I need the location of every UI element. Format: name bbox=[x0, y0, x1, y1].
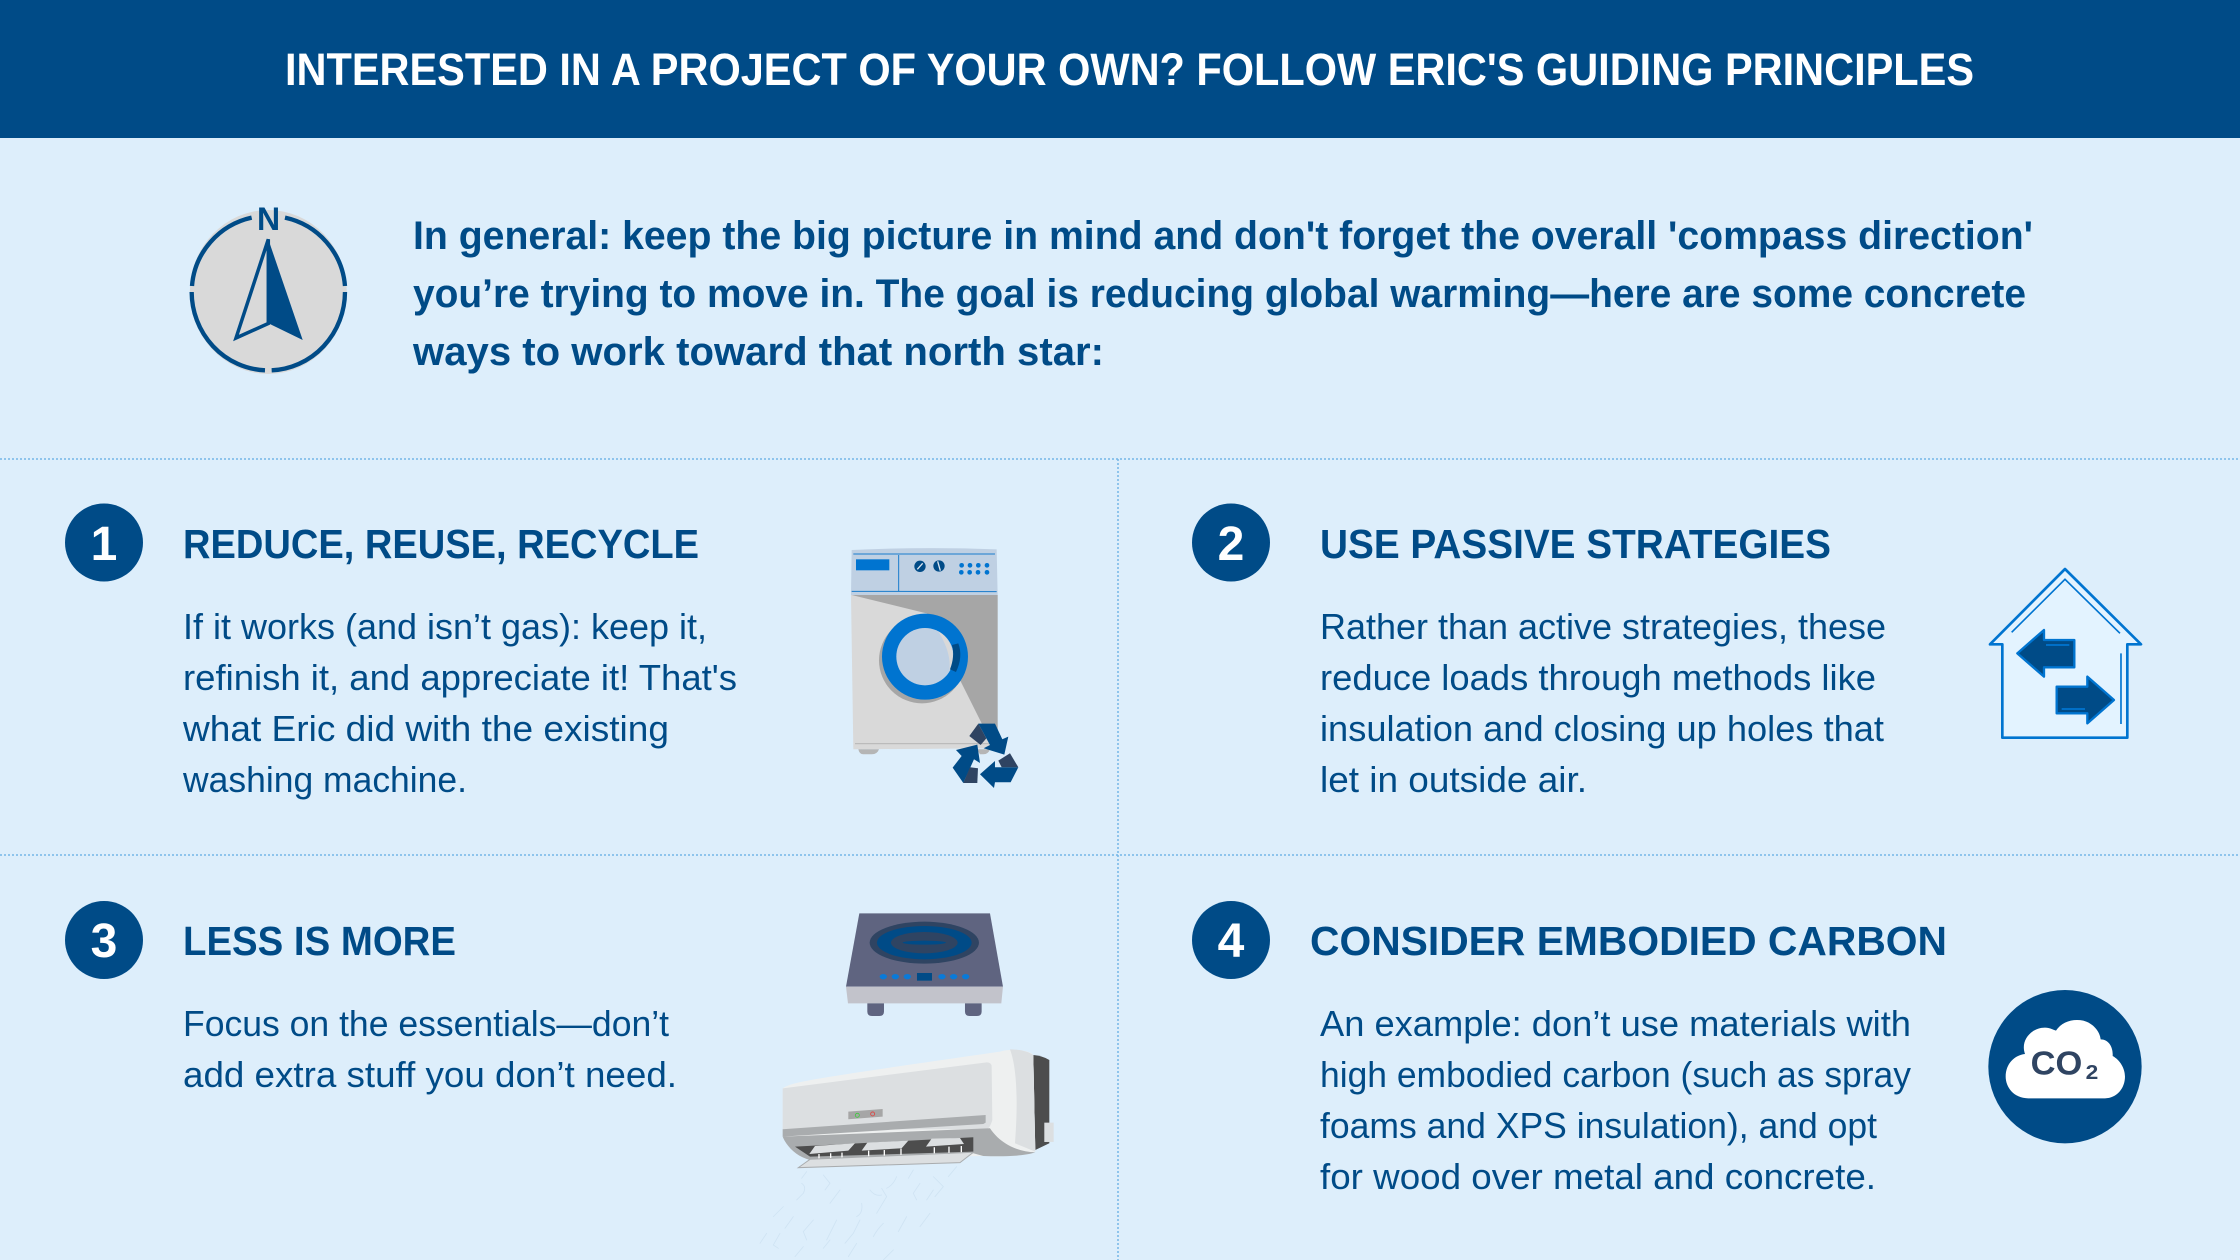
icon: washing machine with recycle symbol bbox=[851, 548, 1018, 788]
icon: CO2 cloud: 2 bbox=[2086, 1061, 2098, 1084]
number badge 1 bbox=[65, 504, 143, 582]
icon: compass: N bbox=[257, 201, 280, 237]
number badge 4: 4 bbox=[1218, 915, 1245, 968]
body text 4: high embodied carbon (such as spray bbox=[1320, 1054, 1911, 1095]
number badge 4 bbox=[1192, 901, 1270, 979]
heading 2: USE PASSIVE STRATEGIES bbox=[1320, 521, 1831, 567]
body text 1 bbox=[182, 606, 737, 800]
icon: compass bbox=[190, 201, 347, 374]
header banner bbox=[0, 0, 2240, 138]
body text 1: refinish it, and appreciate it! That's bbox=[183, 657, 737, 698]
panel: use passive strategies bbox=[1192, 504, 2141, 800]
number badge 2 bbox=[1192, 504, 1270, 582]
body text 4 bbox=[1320, 1003, 1911, 1197]
number badge 3 bbox=[65, 901, 143, 979]
number badge 2: 2 bbox=[1218, 518, 1244, 571]
panel: less is more bbox=[65, 901, 1054, 1260]
body text 3: add extra stuff you don’t need. bbox=[183, 1054, 677, 1095]
body text 2: let in outside air. bbox=[1320, 759, 1587, 800]
heading 3: LESS IS MORE bbox=[183, 918, 456, 964]
title: INTERESTED IN A PROJECT OF YOUR OWN? FOLLOW ERIC'S GUIDING PRINCIPLES bbox=[285, 44, 1974, 95]
body text 2: Rather than active strategies, these bbox=[1320, 606, 1886, 647]
icon: CO2 cloud: CO bbox=[2031, 1045, 2082, 1082]
heading 1: REDUCE, REUSE, RECYCLE bbox=[183, 521, 699, 567]
icon: CO2 cloud bbox=[1988, 990, 2142, 1143]
body text 4: An example: don’t use materials with bbox=[1320, 1003, 1911, 1044]
body text 3 bbox=[183, 1003, 677, 1095]
body text 3: Focus on the essentials—don’t bbox=[183, 1003, 669, 1044]
body text 2 bbox=[1320, 606, 1886, 800]
number badge 1: 1 bbox=[91, 518, 117, 571]
icon: air conditioner bbox=[760, 1049, 1054, 1260]
body text 1: If it works (and isn’t gas): keep it, bbox=[183, 606, 707, 647]
body text 4: for wood over metal and concrete. bbox=[1320, 1156, 1876, 1197]
intro text bbox=[412, 214, 2033, 374]
body text 2: insulation and closing up holes that bbox=[1320, 708, 1884, 749]
heading 4: CONSIDER EMBODIED CARBON bbox=[1310, 918, 1947, 964]
body text 1: washing machine. bbox=[182, 759, 467, 800]
intro text: you’re trying to move in. The goal is reducing global warming—here are some concrete bbox=[413, 272, 2026, 316]
panel: consider embodied carbon bbox=[1192, 901, 2142, 1197]
number badge 3: 3 bbox=[91, 915, 117, 968]
intro text: ways to work toward that north star: bbox=[412, 330, 1104, 374]
icon: house with arrows bbox=[1990, 569, 2141, 738]
body text 1: what Eric did with the existing bbox=[182, 708, 669, 749]
body text 2: reduce loads through methods like bbox=[1320, 657, 1876, 698]
body text 4: foams and XPS insulation), and opt bbox=[1320, 1105, 1877, 1146]
icon: induction cooktop bbox=[846, 913, 1003, 1016]
panel: reduce, reuse, recycle bbox=[65, 504, 1018, 800]
intro text: In general: keep the big picture in mind and don't forget the overall 'compass direction' bbox=[413, 214, 2033, 258]
